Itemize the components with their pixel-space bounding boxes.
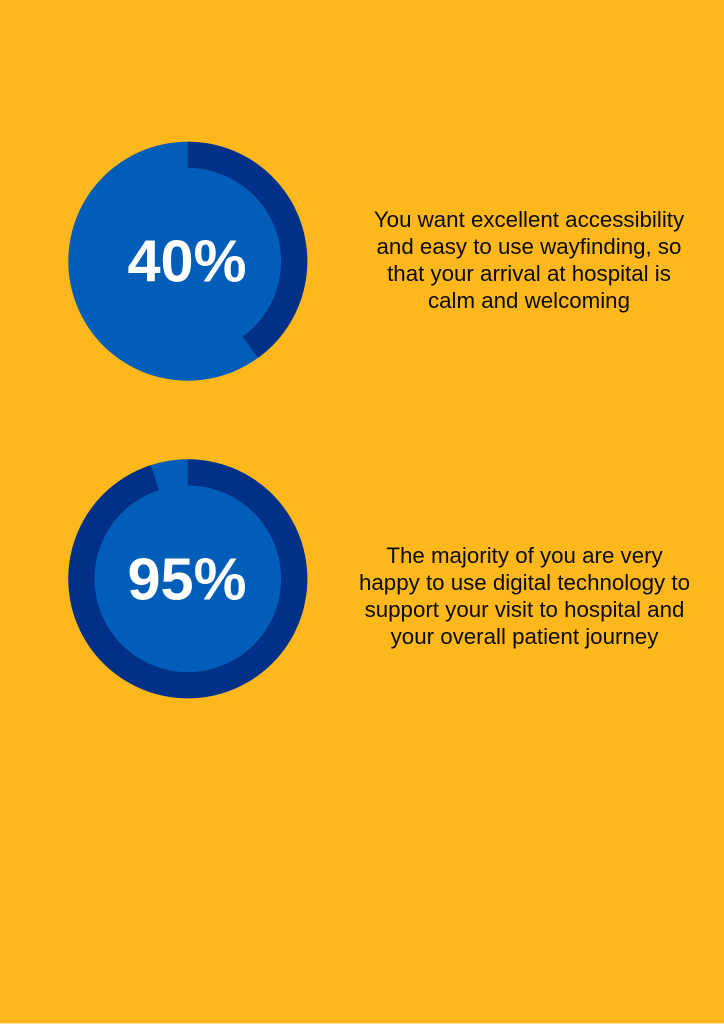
text: digital technology statement: happy to use digital technology to (359, 570, 690, 595)
donut chart: 40% (68, 142, 308, 381)
donut chart: 95%: 95% (127, 545, 247, 612)
text: accessibility statement (374, 207, 684, 313)
text: accessibility statement: You want excellent accessibility (374, 207, 684, 232)
donut chart: 95% (68, 459, 308, 698)
text: digital technology statement: The majority of you are very (386, 543, 663, 568)
text: accessibility statement: that your arrival at hospital is (387, 261, 671, 286)
text: digital technology statement (359, 543, 690, 649)
text: digital technology statement: support your visit to hospital and (365, 597, 684, 622)
text: accessibility statement: calm and welcoming (428, 288, 630, 313)
text: digital technology statement: your overall patient journey (391, 624, 658, 649)
panel: 40% statistic (68, 142, 684, 381)
donut chart: 40%: 40% (127, 228, 247, 295)
panel: 95% statistic (68, 459, 690, 698)
text: accessibility statement: and easy to use wayfinding, so (377, 234, 681, 259)
